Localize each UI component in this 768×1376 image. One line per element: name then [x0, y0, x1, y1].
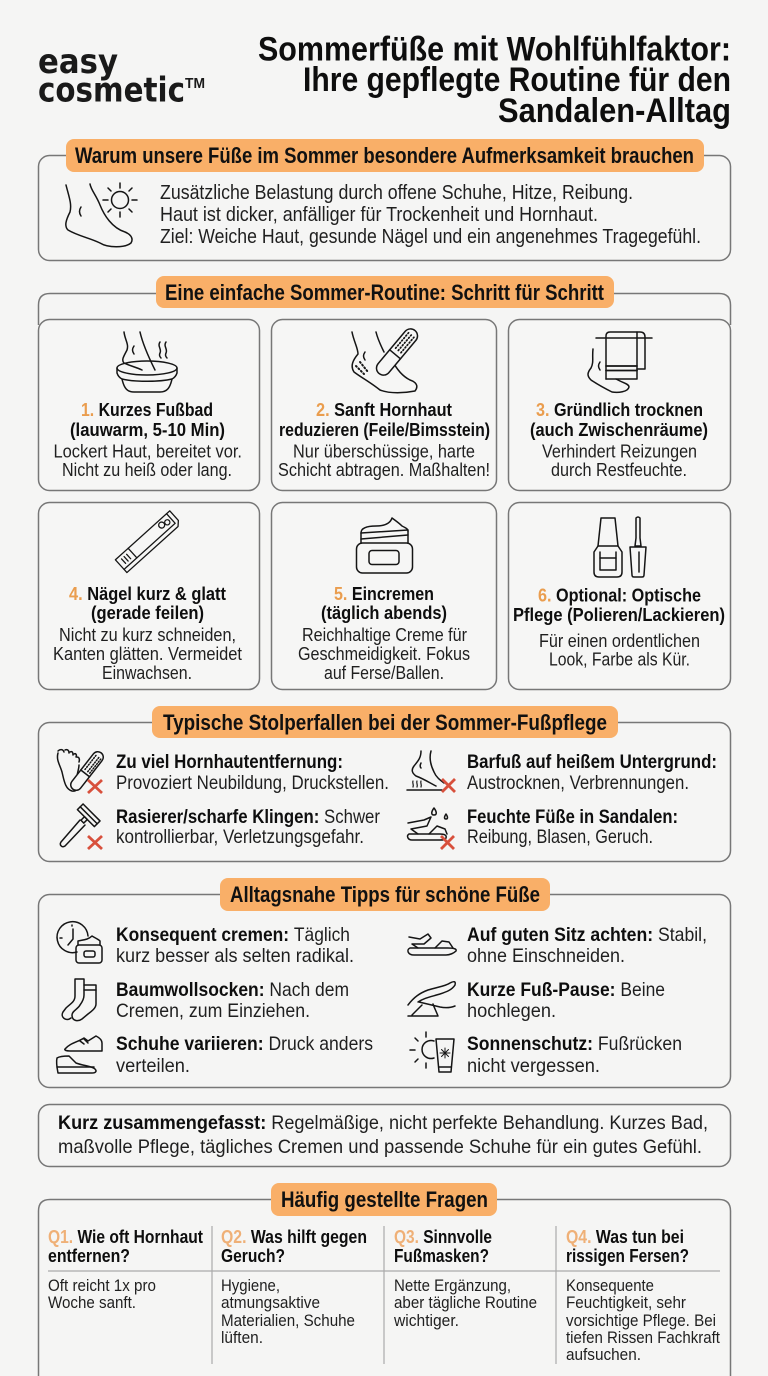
- faq column 2: atmungsaktive: [221, 1294, 320, 1312]
- faq column 4: tiefen Rissen Fachkraft: [566, 1329, 720, 1347]
- panel: stolperfallen: [38, 706, 730, 862]
- faq column 3: Nette Ergänzung,: [394, 1277, 511, 1295]
- text: step 4: (gerade feilen): [91, 602, 204, 623]
- faq column 2: Materialien, Schuhe: [221, 1312, 355, 1330]
- text: step 6: 6. Optional: Optische: [538, 584, 701, 606]
- icon: sun and sunscreen tube: [410, 1032, 454, 1072]
- heading: faq: Häufig gestellte Fragen: [281, 1187, 488, 1212]
- icon: foot and sun: [66, 183, 137, 247]
- text: schuhe: verteilen.: [116, 1055, 190, 1077]
- text: step 3: durch Restfeuchte.: [551, 460, 687, 480]
- faq column 2: lüften.: [221, 1329, 263, 1347]
- faq column 3: wichtiger.: [393, 1312, 459, 1330]
- text: rasierer: [116, 806, 380, 848]
- text: zu viel hornhautentfernung: [116, 751, 389, 794]
- faq column 2: Geruch?: [221, 1246, 285, 1266]
- text: step 5: Reichhaltige Creme für: [302, 625, 467, 645]
- faq column 3: [393, 1227, 537, 1330]
- panel: routine frame: [38, 276, 730, 325]
- panel: summary: Kurz zusammengefasst: Regelmäßige, nicht perfekte Behandlung. Kurzes Bad,: [58, 1112, 708, 1134]
- text: fuss-pause: hochlegen.: [467, 1000, 556, 1022]
- text: step 3: [530, 399, 708, 480]
- text: step 4: [53, 583, 242, 683]
- text: step 4: Einwachsen.: [102, 663, 192, 683]
- text: step 1: [54, 399, 242, 480]
- text: zu viel hornhautentfernung: Zu viel Hornhautentfernung:: [116, 751, 343, 773]
- text: step 3: 3. Gründlich trocknen: [536, 399, 703, 420]
- title: [258, 30, 731, 130]
- logo: easy cosmetic: [38, 42, 205, 110]
- text: konsequent cremen: Konsequent cremen: Täglich: [116, 924, 350, 946]
- text: step 4: 4. Nägel kurz & glatt: [69, 583, 226, 604]
- text: feuchte fuesse: Reibung, Blasen, Geruch.: [467, 826, 653, 848]
- text: warum: [160, 181, 701, 248]
- logo: easy cosmetic: TM: [185, 75, 205, 92]
- text: step 5: Geschmeidigkeit. Fokus: [298, 644, 470, 664]
- panel: tipps: [38, 878, 730, 1088]
- text: step 2: reduzieren (Feile/Bimsstein): [279, 419, 490, 440]
- text: step 5: (täglich abends): [321, 602, 447, 623]
- text: schuhe: Schuhe variieren: Druck anders: [116, 1033, 373, 1055]
- text: zu viel hornhautentfernung: Provoziert Neubildung, Druckstellen.: [116, 772, 389, 794]
- text: step 5: auf Ferse/Ballen.: [324, 663, 444, 683]
- text: step 5: 5. Eincremen: [334, 583, 434, 604]
- text: guter sitz: [467, 924, 707, 967]
- logo: easy cosmetic: easy: [38, 42, 118, 82]
- icon: socks: [62, 979, 96, 1021]
- icon: foot and file with x: [57, 749, 105, 793]
- heading: routine: [156, 276, 614, 308]
- icon: shoes: [57, 1036, 102, 1073]
- faq column 1: Q1. Wie oft Hornhaut: [48, 1227, 203, 1247]
- icon: hot ground with x: [407, 751, 455, 792]
- text: sonnenschutz: [467, 1033, 682, 1077]
- text: sonnenschutz: Sonnenschutz: Fußrücken: [467, 1033, 682, 1055]
- text: step 4: Kanten glätten. Vermeidet: [53, 644, 242, 664]
- card: step 4: [38, 502, 260, 690]
- text: feuchte fuesse: [467, 806, 678, 848]
- faq column 4: rissigen Fersen?: [566, 1246, 689, 1266]
- text: fuss-pause: [467, 979, 665, 1022]
- text: step 1: 1. Kurzes Fußbad: [81, 399, 213, 420]
- faq column 3: Q3. Sinnvolle: [394, 1227, 492, 1247]
- faq column 2: Q2. Was hilft gegen: [221, 1227, 367, 1247]
- text: guter sitz: Auf guten Sitz achten: Stabil,: [467, 924, 707, 946]
- icon: sandal: [408, 934, 456, 955]
- text: step 1: Lockert Haut, bereitet vor.: [54, 442, 242, 462]
- text: step 5: [298, 583, 470, 683]
- faq column 4: [566, 1227, 720, 1364]
- icon: razor with x: [60, 804, 102, 849]
- faq column 4: Q4. Was tun bei: [566, 1227, 684, 1247]
- text: rasierer: kontrollierbar, Verletzungsgefahr.: [116, 826, 364, 848]
- panel: warum: [38, 139, 730, 260]
- text: warum: Zusätzliche Belastung durch offene Schuhe, Hitze, Reibung.: [160, 181, 633, 204]
- icon: foot with file: [352, 326, 420, 393]
- heading: tipps: Alltagsnahe Tipps für schöne Füße: [230, 882, 540, 907]
- icon: clock and jar: [57, 922, 102, 963]
- text: baumwollsocken: [116, 979, 349, 1022]
- text: sonnenschutz: nicht vergessen.: [467, 1055, 600, 1077]
- heading: routine: Eine einfache Sommer-Routine: Schritt für Schritt: [165, 280, 605, 305]
- text: step 6: Für einen ordentlichen: [539, 631, 700, 651]
- text: guter sitz: ohne Einschneiden.: [467, 945, 625, 967]
- faq column 4: Konsequente: [566, 1277, 654, 1295]
- text: schuhe: [116, 1033, 373, 1077]
- icon: cream jar: [356, 518, 412, 573]
- heading: stolperfallen: [152, 706, 618, 738]
- text: step 2: Nur überschüssige, harte: [293, 442, 475, 462]
- faq column 3: aber tägliche Routine: [394, 1294, 537, 1312]
- text: step 6: Look, Farbe als Kür.: [549, 650, 690, 670]
- text: step 2: [278, 399, 490, 480]
- icon: wet sandal with x: [408, 808, 454, 849]
- icon: nail clipper: [115, 511, 181, 573]
- heading: stolperfallen: Typische Stolperfallen bei der Sommer-Fußpflege: [163, 710, 607, 735]
- faq column 4: vorsichtige Pflege. Bei: [566, 1312, 716, 1330]
- panel: summary: maßvolle Pflege, tägliches Cremen und passende Schuhe für ein gutes Gefühl.: [58, 1136, 702, 1158]
- icon: towel and foot: [588, 332, 652, 392]
- text: barfuss: [467, 751, 717, 794]
- panel: summary: [38, 1104, 730, 1166]
- faq column 4: aufsuchen.: [566, 1346, 641, 1364]
- logo: easy cosmetic: cosmetic: [38, 70, 185, 110]
- faq column 2: Hygiene,: [221, 1277, 280, 1295]
- text: baumwollsocken: Baumwollsocken: Nach dem: [116, 979, 349, 1001]
- card: step 3: [508, 320, 730, 490]
- panel: faq: [38, 1183, 730, 1376]
- faq column 1: entfernen?: [48, 1246, 130, 1266]
- text: step 1: Nicht zu heiß oder lang.: [62, 460, 232, 480]
- text: step 2: Schicht abtragen. Maßhalten!: [278, 460, 490, 480]
- faq column 3: Fußmasken?: [394, 1246, 489, 1266]
- text: warum: Haut ist dicker, anfälliger für Trockenheit und Hornhaut.: [160, 203, 598, 226]
- icon: foot bath: [117, 332, 177, 392]
- faq column 1: Oft reicht 1x pro: [48, 1277, 156, 1295]
- text: konsequent cremen: kurz besser als selten radikal.: [116, 945, 354, 967]
- text: step 1: (lauwarm, 5-10 Min): [70, 419, 225, 440]
- heading: warum: [66, 139, 704, 172]
- text: konsequent cremen: [116, 924, 354, 967]
- faq column 2: [221, 1227, 367, 1347]
- card: step 6: [508, 502, 730, 690]
- text: barfuss: Austrocknen, Verbrennungen.: [467, 772, 689, 794]
- text: step 6: Pflege (Polieren/Lackieren): [513, 604, 725, 625]
- icon: nail polish: [594, 517, 646, 577]
- text: step 3: (auch Zwischenräume): [530, 419, 708, 440]
- text: feuchte fuesse: Feuchte Füße in Sandalen:: [467, 806, 678, 828]
- heading: faq: [271, 1183, 497, 1216]
- text: step 2: 2. Sanft Hornhaut: [316, 399, 452, 420]
- text: step 4: Nicht zu kurz schneiden,: [59, 625, 236, 645]
- card: step 5: [272, 502, 496, 690]
- text: rasierer: Rasierer/scharfe Klingen: Schwer: [116, 806, 380, 828]
- text: step 3: Verhindert Reizungen: [542, 442, 697, 462]
- faq column 1: Woche sanft.: [48, 1294, 136, 1312]
- icon: raised legs: [408, 982, 455, 1016]
- text: barfuss: Barfuß auf heißem Untergrund:: [467, 751, 717, 773]
- faq column 1: [48, 1227, 203, 1312]
- heading: tipps: [220, 878, 550, 911]
- card: step 1: [38, 320, 260, 490]
- text: step 6: [513, 584, 725, 670]
- title: Sandalen-Alltag: [498, 92, 731, 130]
- text: baumwollsocken: Cremen, zum Einziehen.: [116, 1000, 310, 1022]
- text: fuss-pause: Kurze Fuß-Pause: Beine: [467, 979, 665, 1001]
- card: step 2: [272, 320, 496, 490]
- faq column 4: Feuchtigkeit, sehr: [566, 1294, 686, 1312]
